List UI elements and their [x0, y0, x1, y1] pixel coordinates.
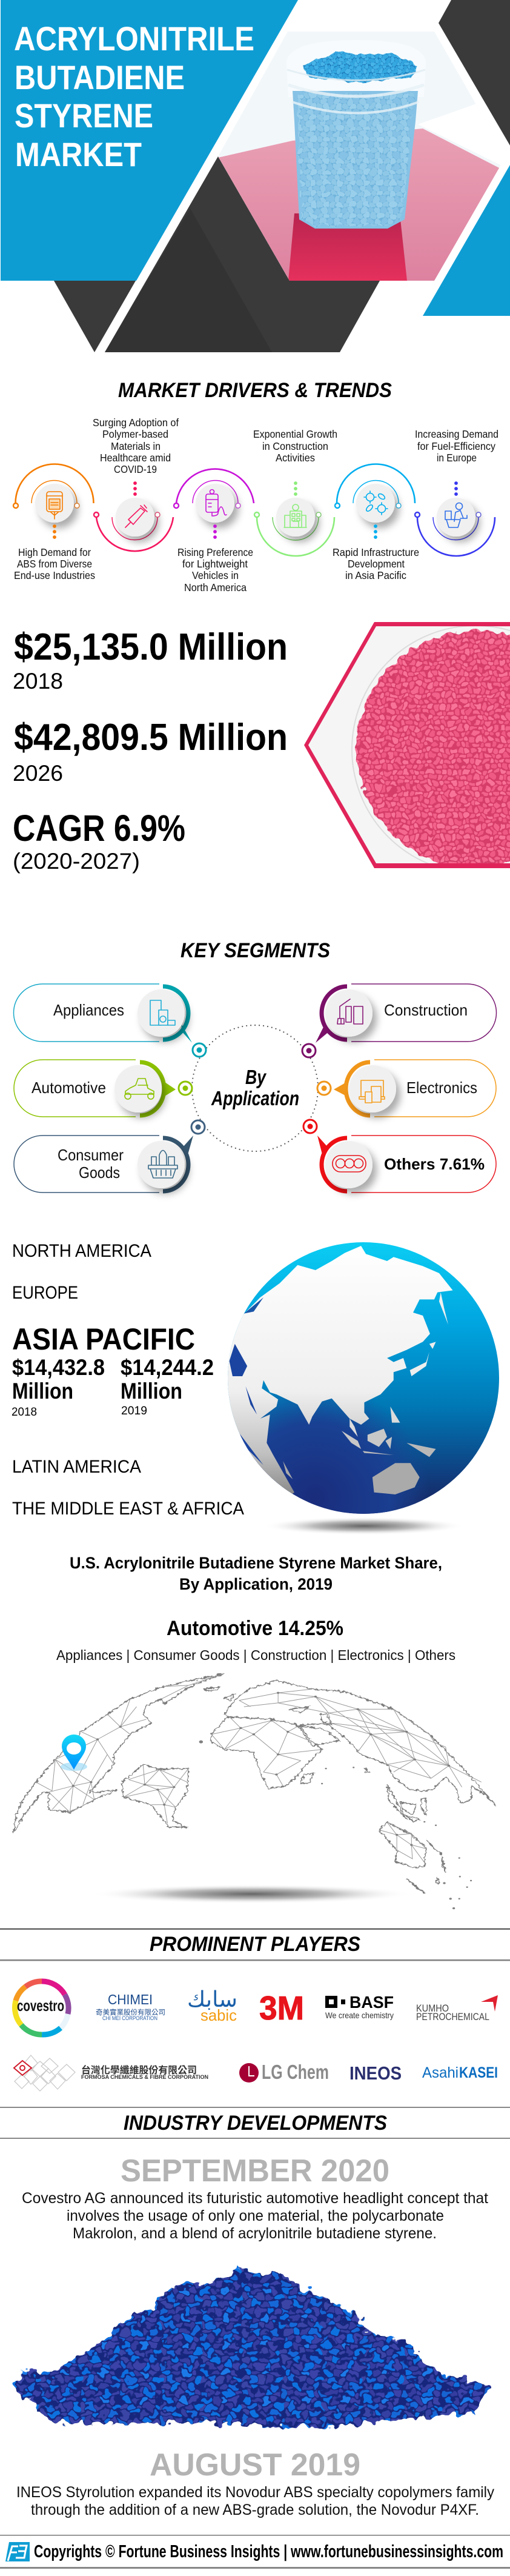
dark center facet: [105, 209, 272, 352]
logo formosa: 台灣化學纖維股份有限公司: [81, 2064, 197, 2076]
asia pacific value 2018: $14,432.8: [12, 1355, 105, 1380]
driver 6 fuel efficiency: Increasing Demand: [415, 428, 498, 440]
arabia and south asia: [297, 1725, 340, 1745]
segment automotive: Automotive: [31, 1079, 106, 1097]
title: BUTADIENE: [15, 58, 185, 96]
region middle east and africa: THE MIDDLE EAST & AFRICA: [12, 1499, 244, 1519]
driver 3 lightweight vehicles: Vehicles in: [192, 569, 239, 581]
driver 3 lightweight vehicles: [174, 469, 254, 594]
logo formosa: [14, 2055, 208, 2091]
logo sabic: [187, 1987, 237, 2024]
logo BASF: BASF: [349, 1993, 394, 2012]
south america outline and network: [122, 1764, 188, 1827]
photo: blue pellet pile: [13, 2269, 489, 2426]
driver 5 infrastructure: in Asia Pacific: [345, 569, 406, 581]
chart title: [70, 1554, 442, 1593]
driver 6 fuel efficiency: for Fuel-Efficiency: [417, 440, 495, 452]
year 2018: 2018: [13, 669, 63, 694]
eurasia outline: [225, 1681, 496, 1806]
segment consumer goods: [14, 1120, 205, 1193]
north america network: [36, 1673, 225, 1812]
north america outline: [14, 1673, 225, 1833]
asia pacific value 2019: 2019: [121, 1405, 147, 1417]
center label by application: [211, 1066, 299, 1109]
logo chimei: [96, 1992, 165, 2021]
heading: prominent players: PROMINENT PLAYERS: [150, 1933, 360, 1956]
driver 1 high demand: High Demand for: [18, 546, 91, 558]
driver 4 construction: [253, 428, 337, 556]
driver 5 infrastructure: Rapid Infrastructure: [333, 546, 419, 558]
divider rule: [0, 1959, 510, 1961]
text ineos development: through the addition of a new ABS-grade solution, the Novodur P4XF.: [31, 2501, 479, 2518]
segment automotive: [14, 1060, 192, 1117]
chart title: U.S. Acrylonitrile Butadiene Styrene Market Share,: [70, 1554, 442, 1572]
driver 5 infrastructure: Development: [348, 558, 405, 570]
logo covestro: [15, 1981, 68, 2035]
logo sabic: سابك: [187, 1987, 237, 2012]
footer: [5, 2542, 503, 2561]
driver 4 construction: Activities: [276, 452, 315, 464]
asia pacific value 2019: [121, 1355, 214, 1417]
logo LG chem: [239, 2061, 329, 2083]
title: ACRYLONITRILE: [14, 19, 254, 58]
segment others: Others 7.61%: [384, 1155, 485, 1173]
logo asahi kasei: KASEI: [459, 2064, 498, 2081]
specks of islands: [199, 1741, 472, 1909]
driver 6 fuel efficiency: [415, 428, 498, 556]
logo asahi kasei: [422, 2064, 498, 2081]
panel: US market share: [14, 1554, 496, 1909]
leading segment: Automotive 14.25%: [167, 1617, 343, 1640]
location pin: [61, 1735, 87, 1771]
panel: prominent players logos: [14, 1981, 498, 2091]
heading: market drivers and trends: MARKET DRIVERS & TRENDS: [118, 379, 392, 402]
segment electronics: Electronics: [406, 1079, 477, 1097]
driver 3 lightweight vehicles: North America: [184, 581, 247, 594]
driver 3 lightweight vehicles: for Lightweight: [182, 558, 248, 570]
segment appliances: Appliances: [53, 1001, 124, 1019]
divider rule: [0, 2567, 510, 2569]
title: MARKET: [15, 135, 142, 173]
text covestro development: [22, 2190, 488, 2242]
panel: market drivers: [13, 417, 498, 594]
segment construction: Construction: [384, 1001, 468, 1019]
dark triangle left: [54, 281, 136, 352]
text covestro development: involves the usage of only one material, the polycarbonate: [67, 2207, 444, 2224]
panel: industry developments: [13, 2153, 494, 2518]
driver 4 construction: in Construction: [262, 440, 328, 452]
driver 2 healthcare: [93, 417, 179, 551]
logo chimei: CHIMEI: [108, 1992, 153, 2007]
dark decorative top right: [439, 0, 510, 146]
asia pacific value 2018: Million: [12, 1379, 73, 1403]
world map network: [14, 1673, 496, 1909]
logo covestro: covestro: [17, 1996, 64, 2015]
blue decorative bottom right: [423, 165, 510, 316]
year 2026: 2026: [13, 761, 63, 786]
indochina and indonesia: [301, 1768, 446, 1894]
region europe: EUROPE: [12, 1283, 78, 1303]
divider rule: [0, 2107, 510, 2108]
CAGR value: CAGR 6.9%: [13, 808, 185, 849]
photo: pink pellets in hexagon: [304, 622, 510, 873]
logo asahi kasei: Asahi: [422, 2064, 459, 2081]
driver 1 high demand: ABS from Diverse: [17, 558, 92, 570]
center label by application: By: [245, 1066, 267, 1088]
photo: jar of blue pellets: [215, 30, 510, 285]
dark center shape: [105, 156, 380, 352]
logo chimei: CHI MEI CORPORATION: [102, 2015, 157, 2021]
other segments list: Appliances | Consumer Goods | Construction | Electronics | Others: [56, 1647, 455, 1663]
asia pacific value 2019: $14,244.2: [121, 1355, 214, 1380]
driver 4 construction: Exponential Growth: [253, 428, 337, 440]
center label by application: Application: [211, 1087, 299, 1109]
logo sabic: sabic: [200, 2006, 237, 2024]
heading: key segments: KEY SEGMENTS: [180, 939, 330, 962]
title: [14, 19, 254, 173]
date august 2019: AUGUST 2019: [150, 2447, 360, 2483]
region latin america: LATIN AMERICA: [12, 1457, 141, 1477]
logo kumho petrochemical: PETROCHEMICAL: [416, 2011, 489, 2022]
logo kumho petrochemical: KUMHO: [416, 2002, 449, 2014]
segment appliances: [14, 984, 206, 1057]
icon: fortune business insights logo: [5, 2542, 30, 2561]
title: STYRENE: [15, 96, 153, 135]
panel: regions: [12, 1241, 244, 1519]
australia outline and network: [379, 1822, 426, 1867]
panel: market size statistics: [13, 626, 288, 874]
region asia pacific: ASIA PACIFIC: [12, 1322, 195, 1356]
value 2026: $42,809.5 Million: [14, 717, 288, 758]
segment construction: [302, 984, 496, 1057]
blue title panel: [1, 0, 298, 281]
value 2018: $25,135.0 Million: [14, 626, 288, 668]
chart title: By Application, 2019: [179, 1575, 333, 1593]
globe: [228, 1242, 499, 1534]
segment consumer goods: Consumer: [58, 1146, 124, 1164]
asia pacific value 2019: Million: [121, 1379, 182, 1403]
region north america: NORTH AMERICA: [12, 1241, 151, 1261]
driver 2 healthcare: COVID-19: [114, 463, 157, 475]
header banner: [1, 0, 510, 352]
heading: industry developments: INDUSTRY DEVELOPMENTS: [124, 2112, 387, 2135]
date september 2020: SEPTEMBER 2020: [121, 2153, 389, 2189]
text ineos development: INEOS Styrolution expanded its Novodur ABS specialty copolymers family: [16, 2484, 494, 2501]
driver 2 healthcare: Polymer-based: [102, 428, 168, 440]
asia pacific value 2018: [12, 1355, 105, 1419]
text ineos development: [16, 2484, 494, 2518]
logo LG chem: LG Chem: [262, 2061, 329, 2083]
driver 2 healthcare: Surging Adoption of: [93, 417, 179, 429]
logo ineos: INEOS: [349, 2062, 402, 2084]
driver 2 healthcare: Materials in: [111, 440, 161, 452]
driver 3 lightweight vehicles: Rising Preference: [177, 546, 253, 558]
segment consumer goods: Goods: [79, 1163, 120, 1182]
text covestro development: Covestro AG announced its futuristic automotive headlight concept that: [22, 2190, 488, 2207]
divider rule: [0, 2138, 510, 2139]
panel: key segments: [14, 984, 496, 1193]
driver 5 infrastructure: [333, 464, 419, 581]
text covestro development: Makrolon, and a blend of acrylonitrile butadiene styrene.: [73, 2225, 437, 2242]
logo BASF: [325, 1993, 394, 2020]
logo formosa: FORMOSA CHEMICALS & FIBRE CORPORATION: [81, 2074, 208, 2080]
segment electronics: [317, 1060, 496, 1117]
dotted center circle: [192, 1025, 318, 1151]
logo chimei: 奇美實業股份有限公司: [96, 2008, 165, 2016]
map shadow: [91, 1884, 412, 1904]
driver 2 healthcare: Healthcare amid: [100, 452, 171, 464]
globe shadow: [263, 1517, 465, 1535]
segment others: [303, 1120, 496, 1193]
logo kumho petrochemical: [416, 1995, 498, 2022]
network nodes: [72, 1692, 450, 1846]
asia pacific value 2018: 2018: [12, 1406, 37, 1419]
logo 3M: 3M: [259, 1989, 304, 2027]
CAGR period: (2020-2027): [13, 849, 140, 874]
driver 6 fuel efficiency: in Europe: [437, 452, 477, 464]
driver 1 high demand: [13, 464, 95, 581]
logo BASF: We create chemistry: [325, 2010, 394, 2020]
driver 1 high demand: End-use Industries: [14, 569, 95, 581]
africa outline and network: [211, 1717, 322, 1788]
